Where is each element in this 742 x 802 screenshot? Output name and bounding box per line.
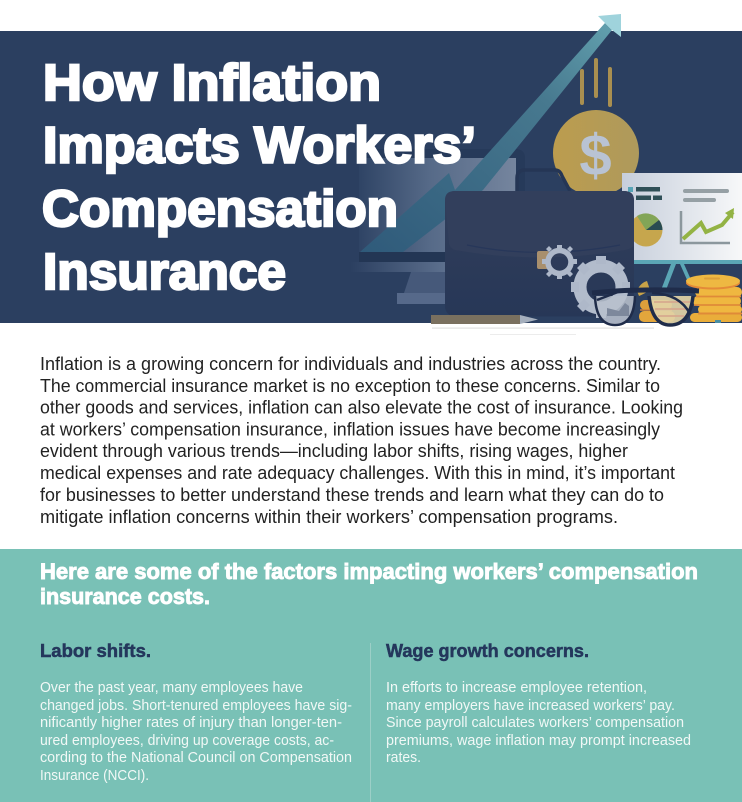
- title: [42, 54, 476, 300]
- icon: desktop monitor: [350, 149, 525, 320]
- icon: stack of gold coins: [637, 274, 742, 323]
- header banner: [0, 14, 742, 325]
- column: labor shifts: Labor shifts.: [40, 640, 151, 661]
- column: wage growth concerns: premiums, wage inflation may prompt increased: [386, 733, 691, 749]
- icon: rising arrow: [360, 14, 621, 252]
- intro paragraph: The commercial insurance market is no exception to these concerns. Similar to: [40, 376, 660, 396]
- column: wage growth concerns: Wage growth concerns.: [386, 640, 589, 661]
- icon: gears: [542, 245, 630, 318]
- reflection under illustration: [432, 328, 654, 335]
- icon: eyeglasses: [592, 290, 699, 325]
- pie chart: [630, 213, 662, 246]
- icon: presentation board: [622, 173, 742, 290]
- column: labor shifts: changed jobs. Short-tenured employees have sig-: [40, 698, 352, 714]
- intro paragraph: Inflation is a growing concern for individuals and industries across the country.: [40, 354, 661, 374]
- illustration: business and growth scene: [350, 14, 742, 325]
- title: Impacts Workers’: [43, 116, 476, 174]
- intro paragraph: evident through various trends—including labor shifts, rising wages, higher: [40, 441, 628, 461]
- line chart: [681, 208, 734, 243]
- intro paragraph: other goods and services, inflation can also elevate the cost of insurance. Looking: [40, 398, 683, 418]
- icon: dollar coin with motion lines: [553, 60, 639, 196]
- intro paragraph: at workers’ compensation insurance, inflation issues have become increasingly: [40, 420, 660, 440]
- title: How Inflation: [43, 54, 381, 111]
- column: wage growth concerns: [386, 640, 691, 766]
- column: labor shifts: cording to the National Council on Compensation: [40, 750, 352, 766]
- icon: pencil: [431, 315, 538, 324]
- intro paragraph: [40, 354, 683, 527]
- icon: briefcase: [445, 170, 634, 316]
- column: wage growth concerns: Since payroll calculates workers’ compensation: [386, 715, 684, 731]
- column: wage growth concerns: many employers have increased workers’ pay.: [386, 698, 675, 714]
- title: Insurance: [43, 243, 286, 300]
- column: wage growth concerns: rates.: [386, 750, 421, 766]
- factors heading: [40, 559, 698, 609]
- column: wage growth concerns: In efforts to increase employee retention,: [386, 680, 647, 696]
- icon: dollar coin with motion lines: $: [579, 123, 612, 188]
- factors heading: Here are some of the factors impacting workers’ compensation: [40, 559, 698, 584]
- intro paragraph: mitigate inflation concerns within their workers’ compensation programs.: [40, 507, 618, 527]
- column: labor shifts: nificantly higher rates of injury than longer-ten-: [40, 715, 342, 731]
- column: labor shifts: ured employees, driving up coverage costs, ac-: [40, 733, 334, 749]
- column: labor shifts: Insurance (NCCI).: [40, 768, 149, 784]
- intro paragraph: medical expenses and rate adequacy challenges. With this in mind, it’s important: [40, 463, 675, 483]
- column: labor shifts: [40, 640, 352, 784]
- factors heading: insurance costs.: [40, 584, 210, 609]
- intro paragraph: for businesses to better understand these trends and learn what they can do to: [40, 485, 664, 505]
- title: Compensation: [42, 180, 398, 237]
- panel: factors: [0, 549, 742, 802]
- column: labor shifts: Over the past year, many employees have: [40, 680, 303, 696]
